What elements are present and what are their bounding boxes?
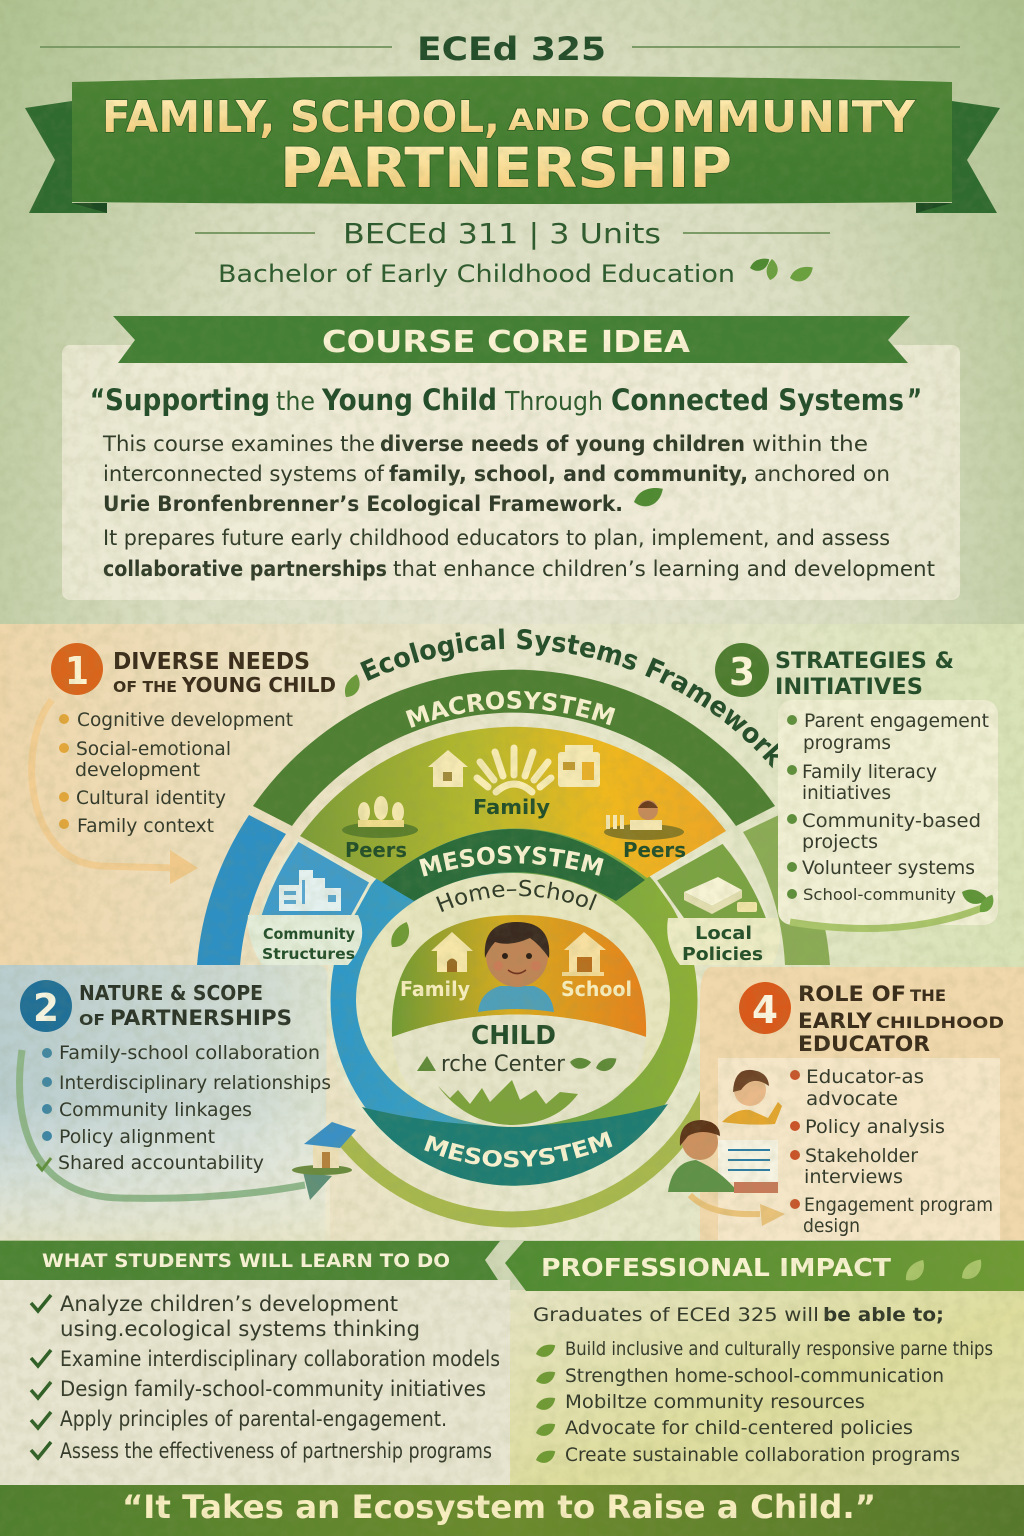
- core idea quote: Young Child: [321, 383, 497, 417]
- learn list: Apply principles of parental-engagement.: [60, 1407, 447, 1431]
- learn list: [60, 1292, 500, 1463]
- core idea description: diverse needs of young children: [380, 432, 745, 456]
- icon: trees: [342, 796, 418, 838]
- impact intro: Graduates of ECEd 325 will: [533, 1304, 819, 1326]
- list: strategies: [787, 710, 989, 904]
- impact list: Create sustainable collaboration programs: [565, 1444, 960, 1466]
- core bottom pale area: [392, 1014, 646, 1126]
- heading 4: [798, 982, 1004, 1056]
- arrow: diverse needs: [32, 700, 198, 884]
- local policies label: [667, 918, 780, 965]
- list: educator roles: [790, 1066, 993, 1237]
- learn ribbon: WHAT STUDENTS WILL LEARN TO DO: [42, 1250, 450, 1272]
- mesosystem band: MESOSYSTEM: [419, 846, 604, 876]
- list: strategies: initiatives: [802, 782, 891, 804]
- footer quote bar: [0, 1485, 1024, 1536]
- impact list: Strengthen home-school-communication: [565, 1365, 944, 1387]
- outer blue band: [197, 815, 286, 965]
- title banner: FAMILY, SCHOOL,: [102, 92, 500, 143]
- learn list: using.ecological systems thinking: [60, 1317, 420, 1341]
- list: educator roles: interviews: [804, 1166, 903, 1188]
- icon: building: [558, 745, 600, 787]
- exosystem labels and icons: [248, 745, 780, 965]
- impact intro: be able to;: [823, 1304, 944, 1326]
- arrow: partnerships: [20, 1050, 332, 1200]
- macrosystem band: MACROSYSTEM: [406, 690, 616, 728]
- learn panel background: [0, 1280, 510, 1485]
- learn list: Examine interdisciplinary collaboration models: [60, 1347, 500, 1371]
- heading 4: CHILDHOOD: [876, 1013, 1004, 1032]
- panel: what students will learn: [0, 1241, 510, 1485]
- core idea description: that enhance children’s learning and development: [393, 557, 935, 581]
- list: diverse needs: [59, 709, 293, 837]
- course code heading: ECEd 325: [417, 30, 606, 68]
- core idea description: anchored on: [754, 462, 890, 486]
- core idea description: This course examines the: [102, 432, 375, 456]
- badge 4: 4: [752, 988, 778, 1032]
- icon: house: [428, 750, 468, 787]
- list: partnerships: Policy alignment: [59, 1126, 215, 1148]
- impact leaf bullets: [536, 1345, 555, 1463]
- learn list: Design family-school-community initiatives: [60, 1377, 486, 1401]
- heading 4: EDUCATOR: [798, 1032, 930, 1056]
- heading 4: EARLY: [798, 1009, 873, 1033]
- list: partnerships: Shared accountability: [58, 1152, 264, 1174]
- course number and units: BECEd 311 | 3 Units: [343, 217, 661, 250]
- core idea quote: “: [90, 383, 105, 417]
- panel 2: nature and scope of partnerships: [0, 965, 356, 1240]
- heading 2: NATURE & SCOPE: [79, 981, 263, 1005]
- badge 2: 2: [33, 986, 59, 1030]
- core family label: Family: [400, 977, 470, 1001]
- core idea quote: Through: [504, 387, 603, 417]
- core idea quote: [90, 383, 922, 417]
- educator list card: [718, 1058, 1000, 1240]
- list: educator roles: design: [803, 1215, 860, 1237]
- icon: fence and child: [604, 800, 684, 840]
- impact ribbon: PROFESSIONAL IMPACT: [541, 1253, 891, 1282]
- bottom mesosystem label: MESOSYSTEM: [424, 1131, 612, 1168]
- impact panel background: [510, 1290, 1024, 1485]
- title banner: [25, 76, 1000, 213]
- learn list: Analyze children’s development: [60, 1292, 398, 1316]
- family label: Family: [473, 795, 550, 819]
- list: diverse needs: Social-emotional: [76, 738, 231, 760]
- heading 2: PARTNERSHIPS: [110, 1006, 292, 1030]
- list: partnerships: Family-school collaboration: [59, 1042, 320, 1064]
- title banner: COMMUNITY: [600, 92, 916, 143]
- heading 1: [113, 649, 336, 697]
- strategies list card: [778, 700, 998, 925]
- list: educator roles: Engagement program: [804, 1194, 993, 1216]
- mesosystem band: [382, 829, 645, 901]
- badge 1: [51, 643, 103, 695]
- child label: CHILD: [471, 1021, 556, 1051]
- list: diverse needs: Family context: [77, 815, 214, 837]
- core idea quote: the: [276, 387, 315, 417]
- icon: books: [684, 877, 757, 914]
- center label: rche Center: [441, 1052, 566, 1077]
- panel: course core idea: [62, 316, 960, 600]
- list: strategies: Parent engagement: [804, 710, 989, 732]
- impact list: Advocate for child-centered policies: [565, 1417, 913, 1439]
- pale inner circle: [356, 873, 670, 1127]
- icon: family house: [431, 932, 473, 972]
- macrosystem band: [253, 670, 775, 826]
- local policies label: Local: [695, 923, 752, 944]
- impact intro: [533, 1304, 944, 1326]
- learn ribbon: [0, 1241, 500, 1280]
- heading 4: ROLE OF: [798, 982, 906, 1006]
- green swoosh and leaves: [790, 883, 998, 928]
- outer olive arc: [345, 1050, 722, 1219]
- badge 4: [739, 982, 791, 1034]
- heading 2: OF: [79, 1011, 105, 1029]
- list: strategies: Community-based: [802, 810, 981, 832]
- icon: ring leaf: [385, 921, 416, 950]
- core idea description: It prepares future early childhood educators to plan, implement, and assess: [103, 526, 890, 550]
- microsystem ring: [328, 814, 700, 1186]
- peers label left: Peers: [345, 838, 407, 862]
- impact list: Mobiltze community resources: [565, 1391, 865, 1413]
- list: educator roles: Policy analysis: [805, 1116, 945, 1138]
- learn checkmarks: [31, 1295, 51, 1458]
- title banner: AND: [508, 103, 590, 137]
- list: partnerships: [37, 1042, 331, 1174]
- teal lower band: [362, 1104, 668, 1186]
- learn list: Assess the effectiveness of partnership programs: [60, 1439, 492, 1463]
- icon: school house: [562, 932, 606, 976]
- framework background: [0, 624, 1024, 1240]
- list: strategies: School-community: [803, 885, 956, 904]
- list: diverse needs: Cultural identity: [76, 787, 226, 809]
- local policies segment: [655, 842, 769, 922]
- core idea description: family, school, and community,: [389, 462, 748, 486]
- list: diverse needs: development: [75, 759, 200, 781]
- heading 3: STRATEGIES &: [775, 649, 954, 674]
- heading 1: DIVERSE NEEDS: [113, 649, 310, 675]
- heading 1: OF THE: [113, 678, 177, 696]
- icon: center leaves: [417, 1054, 616, 1073]
- core idea description: Urie Bronfenbrenner’s Ecological Framework.: [103, 492, 623, 516]
- panel 3: strategies and initiatives: [715, 643, 998, 928]
- badge 1: 1: [65, 649, 89, 693]
- community structures label: [248, 915, 362, 965]
- panel 2 background: [0, 965, 328, 1240]
- core idea quote: Supporting: [105, 383, 270, 417]
- outer green band: [743, 815, 830, 965]
- peers label right: Peers: [623, 838, 686, 862]
- framework curved title: Ecological Systems Framework: [360, 628, 778, 768]
- list: strategies: Family literacy: [802, 761, 937, 783]
- list: partnerships: Community linkages: [59, 1099, 252, 1121]
- local policies label: Policies: [682, 944, 763, 965]
- icon: community buildings: [279, 870, 341, 911]
- heading 3: INITIATIVES: [775, 675, 923, 700]
- community structures segment: [258, 840, 371, 922]
- heading 1: YOUNG CHILD: [181, 673, 336, 697]
- arrow: educator: [690, 1195, 785, 1226]
- badge 2: [20, 980, 72, 1032]
- list: strategies: programs: [803, 732, 891, 754]
- core idea description: collaborative partnerships: [103, 557, 387, 581]
- heading 2: [79, 981, 292, 1030]
- core idea description: interconnected systems of: [103, 462, 385, 486]
- panel 2 fade: [0, 1100, 330, 1240]
- badge 3: [715, 643, 769, 697]
- badge 3: 3: [729, 650, 755, 694]
- community structures label: Structures: [262, 945, 355, 963]
- panel 1: diverse needs: [32, 643, 336, 884]
- home-school label: Home–School: [436, 880, 597, 912]
- list: educator roles: advocate: [806, 1088, 898, 1110]
- list: diverse needs: Cognitive development: [77, 709, 293, 731]
- core idea quote: ”: [907, 383, 922, 417]
- icon: child: [478, 922, 554, 1012]
- list: strategies: projects: [802, 831, 878, 853]
- icon: sun: [477, 748, 551, 792]
- panel 4: role of the educator: [668, 967, 1024, 1240]
- heading 3: [775, 649, 954, 700]
- core idea quote: Connected Systems: [611, 383, 904, 417]
- core idea ribbon: [113, 316, 910, 363]
- list: strategies: Volunteer systems: [802, 857, 975, 879]
- impact list: [565, 1338, 993, 1466]
- core idea description: within the: [752, 432, 868, 456]
- panel 4 background: [700, 967, 1024, 1240]
- icon: boy reading: [668, 1120, 778, 1193]
- list: educator roles: Stakeholder: [805, 1145, 918, 1167]
- degree program line: Bachelor of Early Childhood Education: [218, 260, 735, 288]
- grass: [438, 1080, 578, 1125]
- list: partnerships: Interdisciplinary relationships: [59, 1072, 331, 1094]
- core school label: School: [561, 977, 632, 1001]
- icon: educator girl: [722, 1070, 782, 1125]
- heading 4: THE: [910, 986, 946, 1005]
- list: educator roles: Educator-as: [806, 1066, 924, 1088]
- icon: title leaf: [339, 674, 366, 700]
- child core: [392, 915, 646, 1126]
- core idea ribbon: COURSE CORE IDEA: [322, 325, 691, 360]
- title banner: PARTNERSHIP: [280, 136, 732, 200]
- impact ribbon: [505, 1241, 1024, 1291]
- core idea description: [102, 432, 935, 581]
- footer quote bar: “It Takes an Ecosystem to Raise a Child.”: [122, 1488, 876, 1526]
- panel: professional impact: [505, 1241, 1024, 1485]
- exosystem sector: [300, 727, 726, 882]
- community structures label: Community: [263, 925, 355, 943]
- icon: school: [292, 1122, 356, 1175]
